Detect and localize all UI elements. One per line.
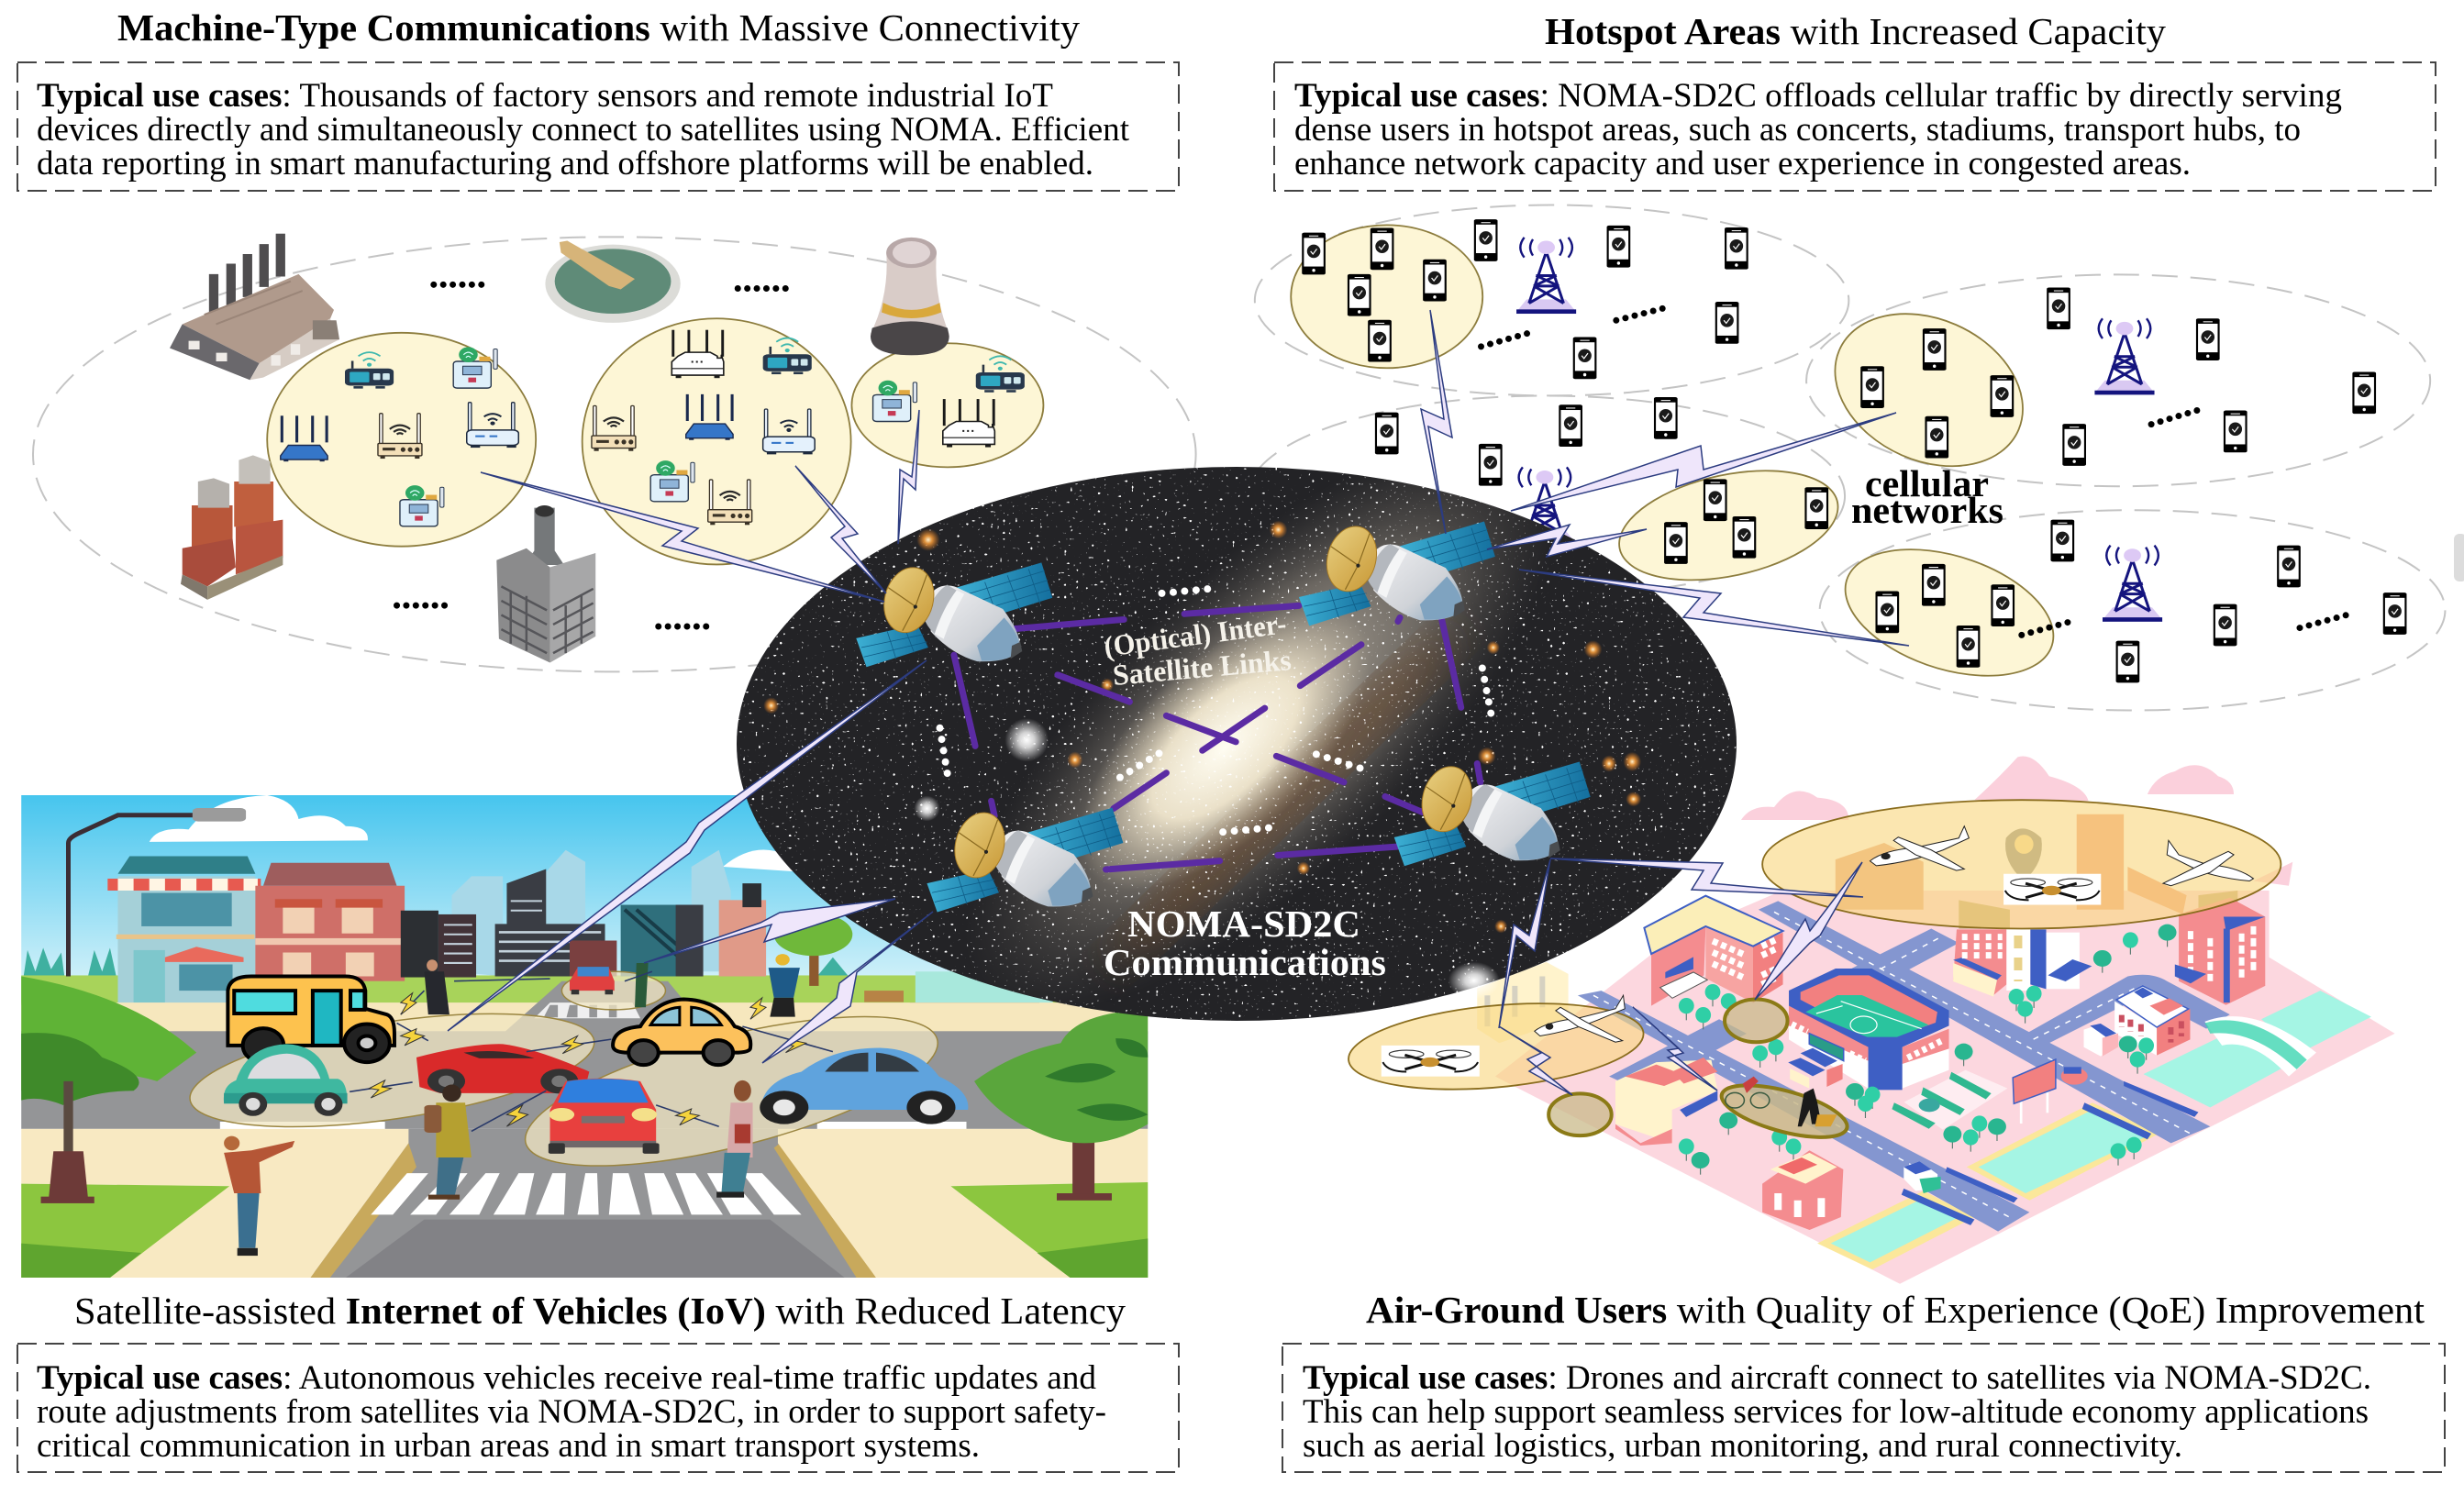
illustration: isometric city (1337, 757, 2395, 1284)
galaxy core (1088, 614, 1360, 882)
ground user: vehicle cluster (1548, 1093, 1612, 1135)
bright stars (763, 521, 1641, 1000)
label: inter-satellite links: (Optical) Inter- (1102, 606, 1288, 663)
central panel: satellite constellation (763, 521, 1641, 1000)
cyclist (1726, 1077, 1770, 1108)
roads (1578, 901, 2230, 1232)
heading: air-ground users: Air-Ground Users with Quality of Experience (QoE) Improvement (1366, 1289, 2425, 1332)
bolt: satellite to IoT cluster 2 (795, 466, 886, 593)
dust lane (1123, 631, 1447, 958)
central panel: space backdrop (737, 467, 1737, 1021)
person: man raising phone (224, 1136, 294, 1256)
distant skyline (451, 850, 731, 977)
dark sky (737, 467, 1737, 1021)
street markings (1593, 912, 2191, 1220)
aircraft: top-left plane (1870, 826, 1969, 870)
beam cluster 4 (1805, 525, 2093, 701)
illustration: street scene with vehicles (21, 795, 1148, 1278)
aircraft: top-right plane (2163, 840, 2253, 886)
street lamp (41, 808, 246, 1203)
vehicle: yellow car (613, 999, 750, 1065)
buildings: left blocks (1477, 962, 1843, 1230)
vehicle: blue beetle (760, 1047, 968, 1124)
hotspot area 3: dashed ellipse (1806, 274, 2430, 486)
text panel: air-ground use cases: Typical use cases: Drones and aircraft connect to satellites via NOMA-SD2C. (1303, 1359, 2371, 1397)
satellite: bottom-right (1394, 761, 1591, 866)
bolt: satellite to hotspot 3 (1511, 413, 1896, 511)
person: worker (769, 954, 800, 1017)
heading: machine-type communications: Machine-Type Communications with Massive Connectivity (117, 6, 1080, 49)
bolt: aircraft to rooftop user (1755, 862, 1862, 1000)
beam cluster 2 (1587, 448, 1870, 603)
truck (1903, 1161, 1941, 1193)
icon: brick towers (181, 455, 283, 600)
label: NOMA-SD2C communications: Communications (1104, 941, 1386, 983)
label: cellular networks (1851, 462, 2003, 531)
label: NOMA-SD2C communications (1104, 903, 1386, 983)
vehicle: red sports car (416, 1044, 589, 1093)
bridge (2204, 1016, 2316, 1077)
parking lot (1894, 1067, 2088, 1130)
tree: mid-right (774, 913, 852, 986)
billboard (2013, 1059, 2056, 1124)
building: large apartment block (1644, 896, 1783, 1006)
beam cluster 3 (1802, 298, 2056, 482)
coverage: left vehicles cluster (189, 1013, 594, 1128)
beam cluster 3 (851, 343, 1043, 467)
icon: grey plant tower (496, 505, 595, 663)
label: cellular networks: cellular (1865, 462, 1989, 504)
icons: cell towers (1515, 238, 2162, 622)
text panel: vehicles use cases (17, 1344, 1179, 1472)
bolt: aircraft to ground vehicle (1499, 1026, 1572, 1095)
coverage: far vehicle cluster (561, 971, 665, 1010)
vehicle: school bus (228, 977, 394, 1063)
icon: settling tank (545, 240, 681, 323)
far grass band (21, 975, 1148, 1005)
bolt: aircraft to cyclist (1633, 1007, 1717, 1091)
bolt: satellite to hotspot 2 (1487, 525, 1647, 557)
roadside plants (24, 947, 849, 977)
bolt: satellite to hotspot 1 (1421, 310, 1452, 534)
vehicle: red SUV (549, 1079, 660, 1154)
city ground (1495, 891, 2395, 1284)
bus shelter (864, 971, 1053, 1006)
dots: more users (1482, 307, 2350, 635)
coverage area: dashed ellipse (33, 237, 1196, 671)
beam cluster 1 (1291, 225, 1482, 368)
drone: upper (2003, 874, 2101, 905)
inter-satellite links (954, 605, 1481, 869)
text panel: machine-type use cases: data reporting in smart manufacturing and offshore platforms will be enabled. (37, 145, 1093, 183)
building: stadium (1788, 969, 1949, 1090)
hotspot area 1: dashed ellipse (1255, 205, 1848, 395)
nested detail layer: central city blocks (1644, 896, 2190, 1175)
label: NOMA-SD2C communications: NOMA-SD2C (1127, 903, 1360, 945)
bolt: satellite to right vehicles (762, 912, 933, 1063)
heading: internet of vehicles: Satellite-assisted Internet of Vehicles (IoV) with Reduced Latency (74, 1290, 1126, 1333)
text panel: air-ground use cases (1282, 1344, 2445, 1472)
vehicle: teal car (224, 1044, 348, 1116)
bolt: satellite to IoT cluster 1 (481, 472, 884, 602)
building: block right of stadium (1953, 929, 2092, 997)
canals (1817, 991, 2371, 1269)
satellite: top-right (1299, 522, 1495, 626)
hotspot area 4: dashed ellipse (1820, 510, 2445, 711)
person: far pedestrian (635, 963, 649, 1007)
coverage: aircraft and drone small (1337, 991, 1655, 1102)
wireless links: lightning bolts (448, 310, 1909, 1095)
bolt: satellite to large aircraft cluster (1550, 858, 1863, 897)
ground user: rooftop cluster (1725, 999, 1788, 1042)
label: cellular networks: networks (1851, 489, 2003, 531)
icon: factory with chimneys (170, 234, 339, 380)
drone: lower (1382, 1046, 1480, 1077)
foliage: left hill (21, 977, 196, 1091)
text panel: machine-type use cases: devices directly and simultaneously connect to satellites using NOMA. Efficient (37, 111, 1130, 149)
icon: cooling tower (871, 238, 949, 355)
satellite: top-left (856, 562, 1052, 667)
hotspot area 2: dashed ellipse (1248, 395, 1845, 596)
galaxy halo (993, 479, 1530, 987)
buildings: upper-right tower (2175, 898, 2265, 1005)
text panel: machine-type use cases (17, 62, 1179, 191)
text panel: hotspot use cases: dense users in hotspot areas, such as concerts, stadiums, transport hubs, to (1294, 111, 2301, 149)
crosswalk (371, 1173, 802, 1214)
text panel: hotspot use cases: enhance network capacity and user experience in congested areas. (1294, 145, 2191, 183)
icons: smartphones (1302, 219, 2406, 682)
tree: left foliage (21, 1033, 139, 1105)
person: student with backpack (425, 1084, 472, 1200)
satellite: bottom-left (927, 808, 1123, 912)
text panel: machine-type use cases: Typical use cases: Thousands of factory sensors and remote industrial IoT (37, 77, 1053, 115)
trees (1679, 925, 2177, 1175)
ground user: cyclist and walker cluster (1708, 1075, 1860, 1147)
sidewalk and road (21, 981, 1148, 1278)
sky (21, 795, 952, 976)
label: inter-satellite links: Satellite Links (1111, 643, 1293, 692)
starfield (734, 463, 1739, 1024)
coverage: aircraft large (1762, 800, 2281, 929)
bolt: satellite to hotspot 4 (1519, 570, 1909, 646)
panel: cellular hotspot scene (1248, 205, 2445, 711)
beam cluster 2 (583, 318, 851, 564)
street planters (1902, 1081, 2198, 1225)
walker with dog (1798, 1089, 1837, 1126)
small V2X links (350, 971, 833, 1131)
text panel: vehicles use cases: critical communication in urban areas and in smart transport systems. (37, 1427, 980, 1465)
coverage: right vehicles cluster (525, 1016, 938, 1167)
text panel: vehicles use cases: route adjustments from satellites via NOMA-SD2C, in order to support safety- (37, 1393, 1106, 1431)
aircraft: left plane (1535, 995, 1625, 1042)
tree: right (974, 1010, 1148, 1201)
buildings: dark city blocks (401, 869, 766, 978)
icons: IoT devices (281, 330, 1025, 526)
text panel: hotspot use cases: Typical use cases: NOMA-SD2C offloads cellular traffic by directly serving (1294, 77, 2342, 115)
text panel: vehicles use cases: Typical use cases: Autonomous vehicles receive real-time traffic updates and (37, 1359, 1096, 1397)
bolt: satellite to small aircraft cluster (1499, 859, 1550, 1028)
buildings: shop fronts (107, 857, 405, 1005)
bolt: satellite to IoT cluster 3 (898, 410, 919, 544)
label: inter-satellite links (1102, 606, 1293, 692)
scroll handle at right edge (2454, 534, 2464, 581)
pink clouds (1741, 757, 2292, 886)
bolt: satellite to street cluster (644, 899, 895, 963)
white dots: more links (939, 589, 1492, 832)
bolt: satellite to far vehicles (448, 660, 927, 1031)
building: small block at right (2083, 986, 2190, 1057)
vehicle: far red car (570, 967, 615, 994)
text panel: air-ground use cases: This can help support seamless services for low-altitude economy applications (1303, 1393, 2369, 1431)
small lightning icons (370, 993, 806, 1126)
heading: hotspot areas: Hotspot Areas with Increased Capacity (1545, 10, 2166, 52)
person: man in suit (425, 959, 450, 1014)
panel: industrial IoT scene (33, 234, 1196, 671)
person: woman with phone (716, 1080, 753, 1198)
text panel: hotspot use cases (1274, 62, 2436, 191)
ghost buildings beneath aircraft layer (1836, 814, 2237, 929)
clouds (150, 795, 794, 871)
beam cluster 1 (267, 333, 536, 547)
text panel: air-ground use cases: such as aerial logistics, urban monitoring, and rural connectivity. (1303, 1427, 2182, 1465)
dots: more devices (397, 284, 791, 626)
